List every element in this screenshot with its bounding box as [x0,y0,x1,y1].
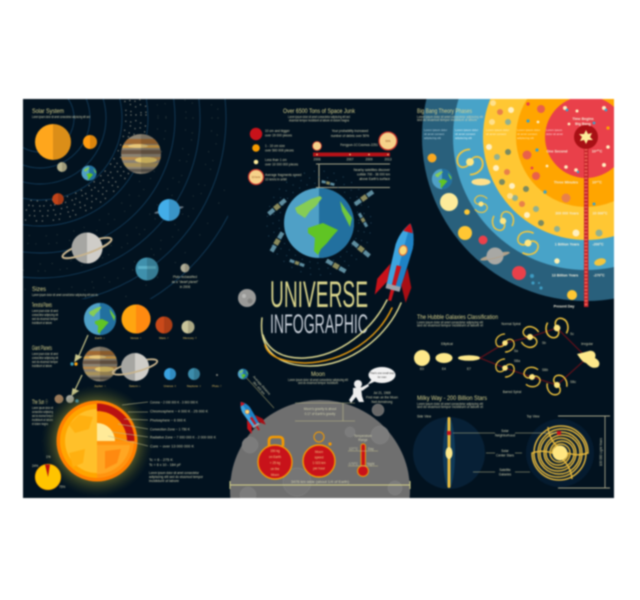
astronaut [349,380,369,403]
time labels: -270°C [593,274,605,278]
distance label: Average distance [252,375,272,396]
terrestrial labels: Earth ♁ [95,336,105,340]
uranus [136,258,158,280]
thermometer: Range [358,438,368,442]
sun temperature note: Tc = 6 - 275 K [149,458,174,462]
galaxy size bracket: 100 000 Light Years [599,438,603,466]
debris legend: over 19 000 pieces [265,134,292,138]
terrestrial text: sed do eiusmod tempor [32,317,59,321]
satellites [267,180,375,274]
dark poster panel [23,99,614,498]
irregular galaxy [577,351,599,368]
panel: solar system: The Sun ☉ [32,398,48,406]
terrestrial labels: Mercury ☿ [183,336,197,340]
small inner planets [70,362,78,366]
side view galaxy [413,417,485,489]
time labels: 10³²°C [592,150,603,154]
venus [57,162,67,172]
debris speed badge: 10 km/s [252,176,261,179]
ring descriptions: Lorem ipsum dolor [517,128,540,132]
moon landing text: Jul 21, 1969 [373,391,391,395]
sun text: Lorem ipsum dolor sit [32,406,53,410]
gravity note: Moon's gravity is about [304,407,336,411]
stopwatch: Moon [315,450,323,454]
barred spirals [496,359,568,397]
kettlebell [258,437,292,479]
debris legend: 10 km/s in orbit [265,178,287,182]
debris legend: Less than 1 cm [265,158,287,162]
hubble labels [420,322,594,394]
moon width scale: 3476 km wide (about 1/4 of Earth) [291,480,349,484]
earth [81,165,97,181]
space junk intro [288,115,350,122]
space junk intro: eiusmod tempor incididunt ut labore et dolore magna [289,118,349,122]
mars large [156,316,172,334]
time labels: -200°C [592,242,604,246]
altitude bracket [316,164,390,188]
time labels: Three Minutes [554,180,578,184]
timeline heading: number of debris over 50% [331,134,369,138]
hubble labels: E4 [442,367,446,371]
giant planet labels [94,384,222,388]
moon text [288,378,348,385]
stopwatch: per hour [313,466,326,470]
panel: space junk [248,108,427,305]
swoosh trail [262,300,401,366]
timeline years: 2007 [346,158,354,162]
neptune large [188,368,200,380]
sun composition pie: 75% [59,485,66,489]
heading: hubble: The Hubble Galaxies Classification [417,314,498,321]
terrestrial text: Lorem ipsum dolor sit amet [32,309,58,313]
hubble labels: SBc [570,380,576,384]
terrestrial labels: Mars ♂ [159,336,169,340]
pluto note: as a "dwarf planet" [172,280,198,284]
terrestrial labels: Venus ♀ [130,336,142,340]
milky way callouts: Neighborhood [495,434,515,438]
milky way callouts: Satellite [499,468,511,472]
big bang core [574,125,598,149]
sun layer labels: Radiative Zone ~ 7 000 000 K - 2 000 000 K [150,436,217,440]
moon craters [240,404,402,503]
sun layer labels: Photosphere ~ 6 000 K [150,418,187,422]
time labels: 13 Billion Years [552,274,578,278]
mars [52,193,64,205]
time labels: Present Day [554,304,574,308]
pluto note: in 2006 [180,285,190,289]
sun text: incididunt ut labore [32,418,53,422]
altitude note [354,168,391,181]
thermometer: 127°C [349,447,359,451]
moon width scale [230,480,410,489]
timeline years: 2013 [384,158,392,162]
giant planet labels: Jupiter ♃ [94,384,106,388]
timeline badge large [379,132,397,150]
terrestrial text [32,309,59,325]
heading: milky way: Milky Way - 200 Billion Stars [417,395,488,402]
milky way callouts [453,429,557,476]
saturn [61,232,113,264]
debris medium [252,144,260,152]
gravity note: 0.17 of Earth's gravity [305,412,336,416]
kettlebell: Moon [271,473,279,477]
hubble intro [417,320,483,328]
view labels: Side View [417,414,432,418]
jupiter [121,134,161,174]
panel: milky way [413,395,610,489]
orbit rings [22,98,228,300]
sun text: sed do eiusmod tempor [32,414,54,418]
altitude note: collide 700 - 36 000 km [357,172,390,176]
moon surface [230,400,410,580]
mercury [83,135,97,149]
kettlebell: 150 kg [270,449,280,453]
timeline years [313,158,392,162]
time labels: Time Begins [572,117,594,121]
sun cross-section [41,385,153,497]
stopwatch: speed [315,456,324,460]
rocket small [233,397,267,435]
hubble labels: Irregular [581,342,594,346]
earth large [84,303,116,335]
timeline years: 2006 [313,158,321,162]
time labels: 10 000°C [592,212,608,216]
timeline heading: Cosmos-2251 [358,143,378,147]
sun layer labels: Chromosphere ~ 4 000 K - 25 000 K [150,410,209,414]
moon landing text [366,391,398,404]
kettlebell: on the [271,467,280,471]
timeline heading [331,129,378,147]
timeline heading: Fengyun-1C [340,143,358,147]
ring descriptions: adipiscing elit [424,136,441,140]
ring descriptions: dolor sit amet [546,132,563,136]
timeline years: 2009 [365,158,373,162]
speech bubble: for man [378,375,387,379]
milky way callouts: Solar [501,429,510,433]
sun [35,124,71,160]
orbital debris dots [267,171,371,275]
time labels: 300 000 Years [555,212,579,216]
hubble intro: Lorem ipsum dolor sit amet consectetur adipiscing elit [417,320,483,324]
milky way intro [417,402,483,409]
terrestrial labels [95,336,197,340]
ring descriptions: adipiscing elit [517,136,534,140]
gravity note [295,403,355,421]
hubble labels: Normal Spiral [501,322,521,326]
ring descriptions: Lorem ipsum [546,128,563,132]
title line: infographic: INFOGRAPHIC [270,309,368,339]
time labels: 10⁹°C [592,180,602,184]
debris legend [265,129,302,182]
hubble labels: E7 [467,367,471,371]
panel: hubble classification [414,313,599,397]
hubble labels: E0 [420,367,424,371]
hubble labels: Sc [570,332,574,336]
planets in teal ring [428,154,577,300]
giant planet labels: Uranus ♅ [164,384,176,388]
speech bubble [367,367,396,385]
hubble labels: SBa [514,359,520,363]
ring descriptions: sit amet consect [455,132,475,136]
neptune [154,199,184,221]
speech bubble: That's one small step [370,371,395,375]
sun text: et dolore magna [32,422,48,426]
sun layer labels: Convection Zone ~ 1 750 K [150,428,191,432]
ring descriptions [424,128,563,140]
ring descriptions: sit amet consect [424,132,444,136]
sizes text: Lorem ipsum dolor sit amet consectetur adipiscing elit sed do [32,293,98,297]
hubble intro: sed do eiusmod tempor incididunt ut labore et [417,324,483,328]
mercury large [182,320,194,334]
panel: moon [230,367,410,580]
view labels: Top View [527,414,540,418]
arrow: earth to gas giants [75,335,88,361]
giant planets text: consectetur adipiscing elit [32,356,58,360]
thermometer: Night [367,462,375,466]
debris speed badge [248,170,264,184]
sun temperature note: incididunt ut labore [149,479,179,483]
giant planet labels: Saturn ♄ [129,384,141,388]
pluto note [172,275,198,289]
panel: big bang phases [417,0,640,308]
concentric phase rings [422,0,640,301]
giant planet labels: Neptune ♆ [187,384,201,388]
thermometer: Temperature [354,434,372,438]
view labels [417,414,540,418]
arrow: giants to sun [72,375,82,395]
hubble labels: Sa [514,349,518,353]
heading: giant planets: Giant Planets [32,345,52,352]
terrestrial text: consectetur adipiscing elit [32,313,58,317]
time labels: One Second [547,150,567,154]
moon landing text: First man on the Moon [366,396,398,400]
pluto [180,264,190,272]
sun text: consectetur adipiscing [32,410,53,414]
big bang intro: Lorem ipsum dolor sit amet consectetur adipiscing elit [417,115,483,119]
milky way callouts: Center Stars [496,454,514,458]
sun layer labels: Core ~ over 13 000 000 K [150,444,195,448]
uranus large [164,368,176,380]
galaxies in blue ring [457,149,607,267]
hubble labels: Sb [542,341,546,345]
thermometer: Day [368,447,374,451]
moon landing text: Neil Armstrong [372,400,393,404]
heading: space junk: Over 6500 Tons of Space Junk [283,108,356,115]
pluto note: Pluto reclassified [173,275,197,279]
milky way callouts: Solar [501,449,510,453]
big bang intro [417,115,483,122]
sun composition pie: 24% [32,464,39,468]
big bang intro: sed do eiusmod tempor incididunt ut labore [417,118,477,122]
hubble labels: Barred Spiral [503,390,522,394]
elliptical galaxies [414,350,480,366]
sun layer labels [108,400,217,448]
earth mini and line [238,369,274,408]
heading: sizes: Sizes [32,286,47,293]
sun temperature note: Lorem ipsum dolor sit amet consectetur [149,471,200,475]
sun composition pie: 1% [46,455,51,459]
sun text [32,406,54,426]
milky way intro: sed do eiusmod tempor incididunt ut labore et [417,405,483,409]
time column [584,137,588,307]
small moon [238,289,256,307]
particles in orange ring [522,102,596,206]
early particles in red ring [563,106,610,173]
timeline heading: Your probability increased [332,129,369,133]
stopwatch [303,432,335,477]
distance label: 384 400 km [252,380,266,396]
galaxy size bracket [558,416,610,488]
venus large [122,304,150,334]
heading: solar system: Solar System [32,108,64,115]
space junk intro: Lorem ipsum dolor sit amet consectetur adipiscing elit sed [288,115,350,119]
terrestrial text: incididunt ut labore [32,321,52,325]
small planets row [54,394,79,404]
asteroid belt [24,98,148,222]
clusters in yellow ring [486,100,602,236]
altitude note: above Earth's surface [359,177,390,181]
jupiter large [83,347,117,381]
heading: moon: Moon [311,371,325,378]
time labels: Big Bang [575,122,591,126]
ring descriptions: sit amet consect [486,132,506,136]
panel: solar system: Terrestrial Planets [32,302,52,309]
debris small [254,160,258,164]
time labels: 1 Billion Years [555,242,579,246]
top view galaxy [526,419,594,487]
giant planets text: Lorem ipsum dolor sit amet [32,352,58,356]
sun temperature note: adipiscing elit sed do eiusmod tempor [149,475,204,479]
debris legend: Average fragments speed [265,173,302,177]
ring descriptions: Lorem ipsum dolor [486,128,509,132]
kettlebell: = 25 kg [270,461,280,465]
milky way intro: Lorem ipsum dolor sit amet consectetur adipiscing elit [417,402,483,406]
debris legend: 1 - 10 cm size [265,144,285,148]
giant planet labels: Pluto ♇ [212,384,222,388]
moon text: sed do eiusmod tempor incididunt [298,381,338,385]
altitude note: Nearby satellites discover [354,168,391,172]
heading: big bang: Big Bang Theory Phases [417,108,473,115]
stopwatch: 1 023 km [312,461,326,465]
milky way callouts: Galaxies [499,472,512,476]
background stars [23,100,224,297]
ring descriptions: adipiscing elit [455,136,472,140]
title [270,274,368,339]
normal spirals [496,313,572,352]
hubble labels: Elliptical [441,342,453,346]
ring descriptions: Lorem ipsum dolor [424,128,447,132]
moon text: Lorem ipsum dolor sit amet consectetur adipiscing elit [288,378,348,382]
timeline badge small [312,142,322,150]
sun temperature note [149,458,204,483]
ring descriptions: sit amet consect [517,132,537,136]
thermometer: -173°C [348,462,359,466]
thermometer [348,434,378,476]
debris legend: over 10 000 000 pieces [265,162,299,166]
sun composition pie [32,455,66,490]
title line: universe: UNIVERSE [270,274,368,315]
giant planets text: sed do eiusmod tempor [32,360,59,364]
timeline bar [313,152,390,156]
saturn large [111,353,159,381]
pluto small [216,374,218,376]
sun temperature note: Tc = 6 x 10 - 184 pF [149,463,181,467]
intro text: solar system: Lorem ipsum dolor sit amet consectetur adipiscing elit sed [32,115,90,119]
time labels [547,117,608,308]
timeline badge large: 50% [385,139,391,143]
sun layer labels: Corona ~ 2 000 000 K - 3 000 000 K [150,400,199,404]
giant planets text: incididunt ut labore [32,364,52,368]
tuning fork lines [480,328,587,385]
ring descriptions: Lorem ipsum dolor [455,128,478,132]
earth main [284,188,354,258]
giant planets text [32,352,59,368]
kettlebell: on Earth [269,455,281,459]
hubble labels: SBb [542,368,548,372]
panel: solar system [22,98,616,499]
rocket main [373,219,427,305]
debris legend: 10 cm and bigger [265,129,291,133]
debris legend: over 500 000 pieces [265,148,294,152]
debris big [250,128,262,140]
